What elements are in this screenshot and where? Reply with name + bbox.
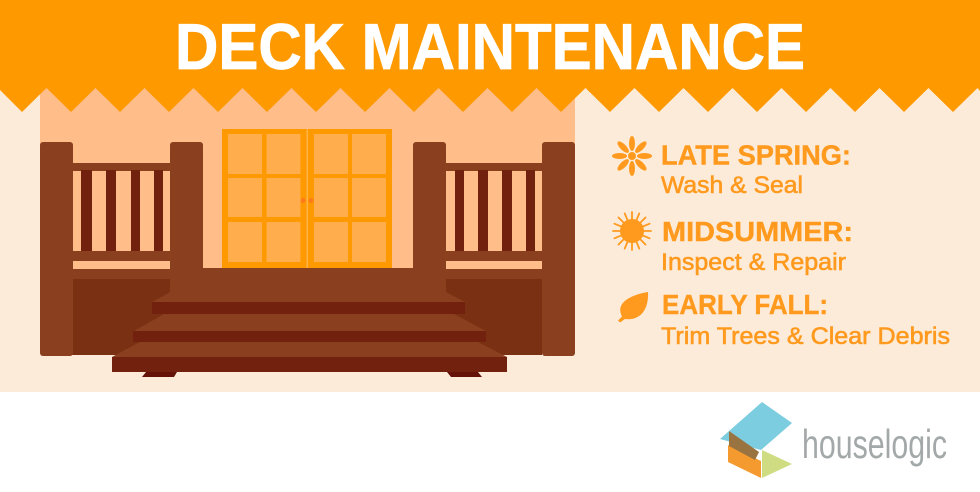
heading: midsummer: MIDSUMMER: — [662, 216, 853, 247]
heading: late spring: LATE SPRING: — [661, 140, 851, 170]
peach wall behind deck — [40, 80, 575, 275]
title: DECK MAINTENANCE — [175, 10, 805, 83]
header banner with zigzag edge — [0, 0, 980, 112]
step 3 — [112, 357, 507, 372]
icon: leaf — [618, 292, 648, 322]
stair feet — [142, 372, 482, 377]
icon: sun — [613, 212, 651, 250]
step 2 — [133, 331, 486, 342]
step 1 — [152, 302, 465, 314]
task: wash and seal: Wash & Seal — [661, 172, 803, 199]
item: midsummer — [613, 212, 853, 276]
item: late spring — [612, 136, 851, 199]
icon: logo mark — [720, 402, 792, 478]
item: early fall — [618, 289, 950, 350]
icon: flower — [612, 136, 652, 176]
double door — [222, 129, 392, 268]
left railing — [72, 163, 170, 279]
deck platform — [152, 268, 465, 302]
task: inspect and repair: Inspect & Repair — [661, 249, 846, 276]
side skirt panels — [72, 279, 542, 355]
heading: early fall: EARLY FALL: — [662, 289, 828, 320]
houselogic logo — [720, 402, 947, 478]
posts — [40, 142, 575, 356]
task: trim trees and clear debris: Trim Trees & Clear Debris — [661, 323, 950, 350]
cream background panel — [0, 80, 980, 392]
right railing — [445, 163, 542, 279]
deck and stairs — [40, 142, 575, 377]
